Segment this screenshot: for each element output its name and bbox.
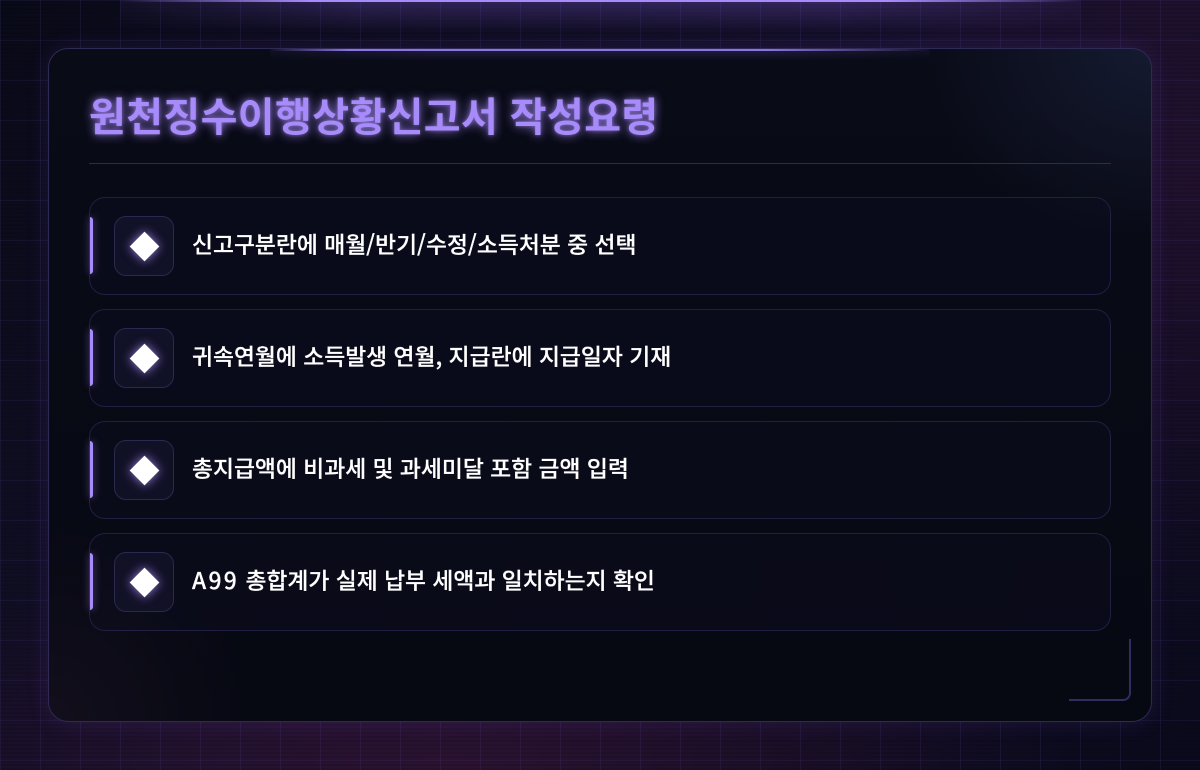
item text 3: 총지급액에 비과세 및 과세미달 포함 금액 입력 xyxy=(192,451,629,484)
list item 2 xyxy=(89,309,1111,407)
list item 1 xyxy=(89,197,1111,295)
corner bracket decoration xyxy=(1069,639,1131,701)
list item 3 xyxy=(89,421,1111,519)
item text 4: A99 총합계가 실제 납부 세액과 일치하는지 확인 xyxy=(192,563,655,596)
top glow bar xyxy=(120,0,1080,2)
icon: diamond xyxy=(114,552,174,612)
icon: diamond xyxy=(114,328,174,388)
title: 원천징수이행상황신고서 작성요령 xyxy=(89,85,659,143)
card top glow bar xyxy=(270,49,930,51)
list item 4 xyxy=(89,533,1111,631)
icon: diamond xyxy=(114,216,174,276)
icon: diamond xyxy=(114,440,174,500)
item text 1: 신고구분란에 매월/반기/수정/소득처분 중 선택 xyxy=(192,227,636,260)
item text 2: 귀속연월에 소득발생 연월, 지급란에 지급일자 기재 xyxy=(192,339,671,372)
